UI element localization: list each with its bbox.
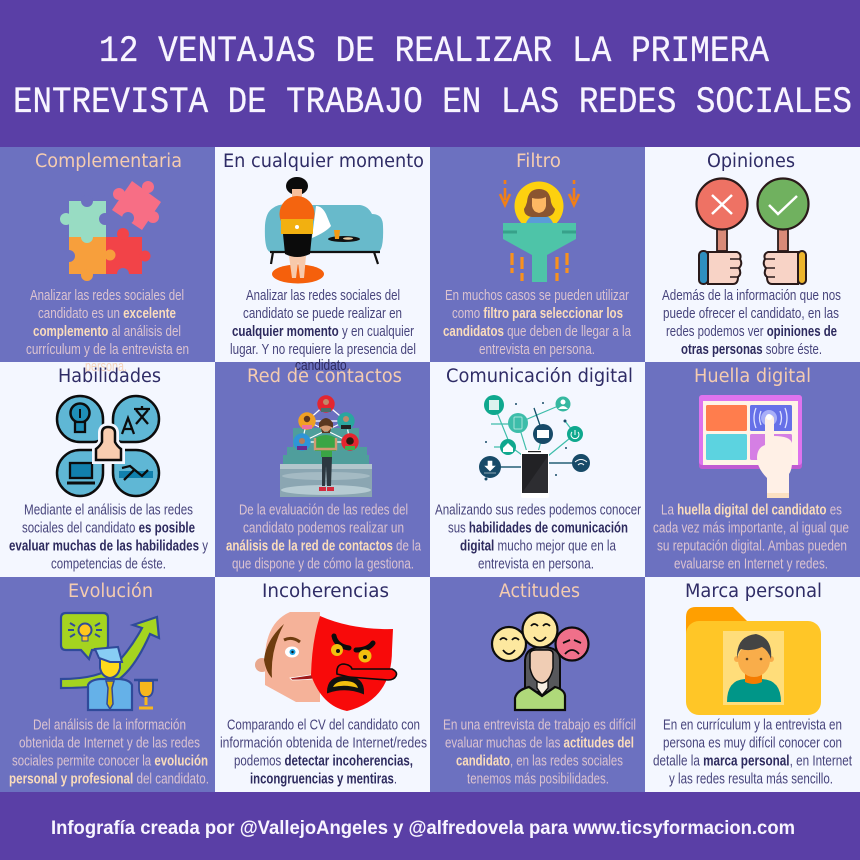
text: huella digital bbox=[653, 502, 849, 572]
text: habilidades: competencias de éste. bbox=[51, 556, 166, 572]
text: complementaria bbox=[26, 288, 189, 358]
panel: evolución bbox=[0, 577, 215, 792]
heading: complementaria: Complementaria bbox=[35, 151, 182, 172]
text: comunicación digital bbox=[435, 502, 641, 572]
text: marca personal bbox=[653, 718, 852, 788]
text: habilidades bbox=[9, 502, 209, 572]
title bbox=[13, 31, 852, 124]
text: comunicación digital: entrevista en persona. bbox=[478, 556, 594, 572]
panel: filtro bbox=[430, 147, 645, 362]
heading: marca personal: Marca personal bbox=[685, 581, 822, 602]
panel: habilidades bbox=[0, 359, 215, 577]
panel: red de contactos bbox=[215, 358, 430, 577]
text: evolución: Del análisis de la información bbox=[33, 718, 186, 734]
heading: opiniones: Opiniones bbox=[707, 151, 795, 172]
text: habilidades: evaluar muchas de las habilidades y bbox=[9, 538, 209, 554]
heading: red de contactos: Red de contactos bbox=[247, 366, 402, 387]
heading: habilidades: Habilidades bbox=[58, 366, 161, 387]
text: en cualquier momento: Analizar las redes sociales del bbox=[246, 288, 400, 304]
text: actitudes: candidato, en las redes sociales bbox=[456, 754, 623, 770]
text: incoherencias bbox=[220, 718, 427, 788]
panel: opiniones bbox=[645, 147, 860, 362]
text: opiniones: otras personas sobre éste. bbox=[681, 342, 822, 358]
text: filtro bbox=[443, 288, 632, 358]
text: en cualquier momento: lugar. Y no requiere la presencia del bbox=[230, 342, 416, 358]
text: opiniones: redes podemos ver opiniones de bbox=[666, 324, 837, 340]
text: evolución: personal y profesional del candidato. bbox=[9, 772, 209, 788]
text: actitudes: En una entrevista de trabajo es difícil bbox=[443, 718, 636, 734]
text: complementaria: currículum y de la entrevista en bbox=[26, 342, 189, 358]
icon: funnel with candidate bbox=[500, 180, 579, 282]
heading: en cualquier momento: En cualquier momento bbox=[223, 151, 424, 172]
heading: evolución: Evolución bbox=[68, 581, 153, 602]
text: evolución bbox=[9, 718, 209, 788]
heading: incoherencias: Incoherencias bbox=[262, 581, 389, 602]
icon: person with mood faces bbox=[492, 612, 588, 710]
text: red de contactos: análisis de la red de contactos de la bbox=[226, 538, 422, 554]
text: actitudes bbox=[443, 718, 636, 788]
text: actitudes: evaluar muchas de las actitudes del bbox=[445, 736, 634, 752]
icon: phone with connected apps bbox=[479, 395, 590, 498]
icon: professional growth bbox=[61, 613, 159, 710]
overflow text: persona: persona. bbox=[85, 359, 127, 375]
text: evolución: sociales permite conocer la evolución bbox=[12, 754, 208, 770]
panel: marca personal bbox=[645, 577, 860, 792]
text: huella digital: La huella digital del candidato es bbox=[661, 502, 842, 518]
icon: man with contact network bbox=[280, 395, 372, 497]
overflow text: candidato: candidato. bbox=[295, 358, 350, 374]
icon: puzzle bbox=[60, 181, 161, 281]
text: opiniones bbox=[662, 288, 841, 358]
text: en cualquier momento: cualquier momento y en cualquier bbox=[232, 324, 414, 340]
text: red de contactos: De la evaluación de las redes del bbox=[239, 502, 408, 518]
text: habilidades: Mediante el análisis de las redes bbox=[24, 502, 193, 518]
text: red de contactos: candidato podemos realizar un bbox=[243, 520, 404, 536]
text: en cualquier momento bbox=[230, 288, 416, 358]
text: filtro: En muchos casos se pueden utilizar bbox=[445, 288, 629, 304]
text: filtro: candidatos que deben de llegar a la bbox=[443, 324, 632, 340]
text: actitudes: tenemos más posibilidades. bbox=[467, 772, 609, 788]
icon: woman with laptop on sofa bbox=[265, 177, 383, 284]
panel: comunicación digital bbox=[430, 362, 645, 577]
heading: actitudes: Actitudes bbox=[499, 581, 580, 602]
text: en cualquier momento: candidato se puede realizar en bbox=[243, 306, 402, 322]
heading: filtro: Filtro bbox=[516, 151, 561, 172]
heading: huella digital: Huella digital bbox=[694, 366, 811, 387]
text: complementaria: complemento al análisis del bbox=[33, 324, 181, 340]
text: incoherencias: incongruencias y mentiras. bbox=[250, 772, 397, 788]
text: comunicación digital: sus habilidades de comunicación bbox=[448, 520, 628, 536]
panel: huella digital bbox=[645, 362, 860, 577]
text: filtro: como filtro para seleccionar los bbox=[452, 306, 623, 322]
text: comunicación digital: Analizando sus redes podemos conocer bbox=[435, 502, 641, 518]
panel: complementaria bbox=[0, 147, 215, 362]
icon: face behind red mask bbox=[255, 612, 396, 711]
text: incoherencias: podemos detectar incoherencias, bbox=[234, 754, 413, 770]
panel: incoherencias bbox=[215, 577, 430, 792]
text: complementaria: Analizar las redes sociales del bbox=[30, 288, 184, 304]
icon: person with four skills bbox=[57, 396, 159, 496]
text: incoherencias: información obtenida de Internet/redes bbox=[220, 736, 427, 752]
text: red de contactos: que dispone y de cómo la gestiona. bbox=[232, 556, 414, 572]
title: 12 VENTAJAS DE REALIZAR LA PRIMERA bbox=[99, 31, 770, 73]
icon: tablet with touching hand bbox=[699, 395, 802, 498]
icon: folder with photo bbox=[686, 607, 821, 715]
footer credit: Infografía creada por @VallejoAngeles y @alfredovela para www.ticsyformacion.com bbox=[51, 818, 795, 839]
text: complementaria: candidato es un excelente bbox=[38, 306, 176, 322]
panel: actitudes bbox=[430, 577, 645, 792]
text: comunicación digital: digital mucho mejor que en la bbox=[460, 538, 617, 554]
heading: comunicación digital: Comunicación digital bbox=[446, 366, 633, 387]
text: incoherencias: Comparando el CV del candidato con bbox=[227, 718, 420, 734]
text: habilidades: sociales del candidato es posible bbox=[22, 520, 195, 536]
text: filtro: entrevista en persona. bbox=[479, 342, 595, 358]
text: red de contactos bbox=[226, 502, 422, 572]
panel: en cualquier momento bbox=[215, 147, 430, 362]
text: evolución: obtenida de Internet y de las redes bbox=[19, 736, 200, 752]
icon: reject and approve signs bbox=[696, 178, 808, 284]
